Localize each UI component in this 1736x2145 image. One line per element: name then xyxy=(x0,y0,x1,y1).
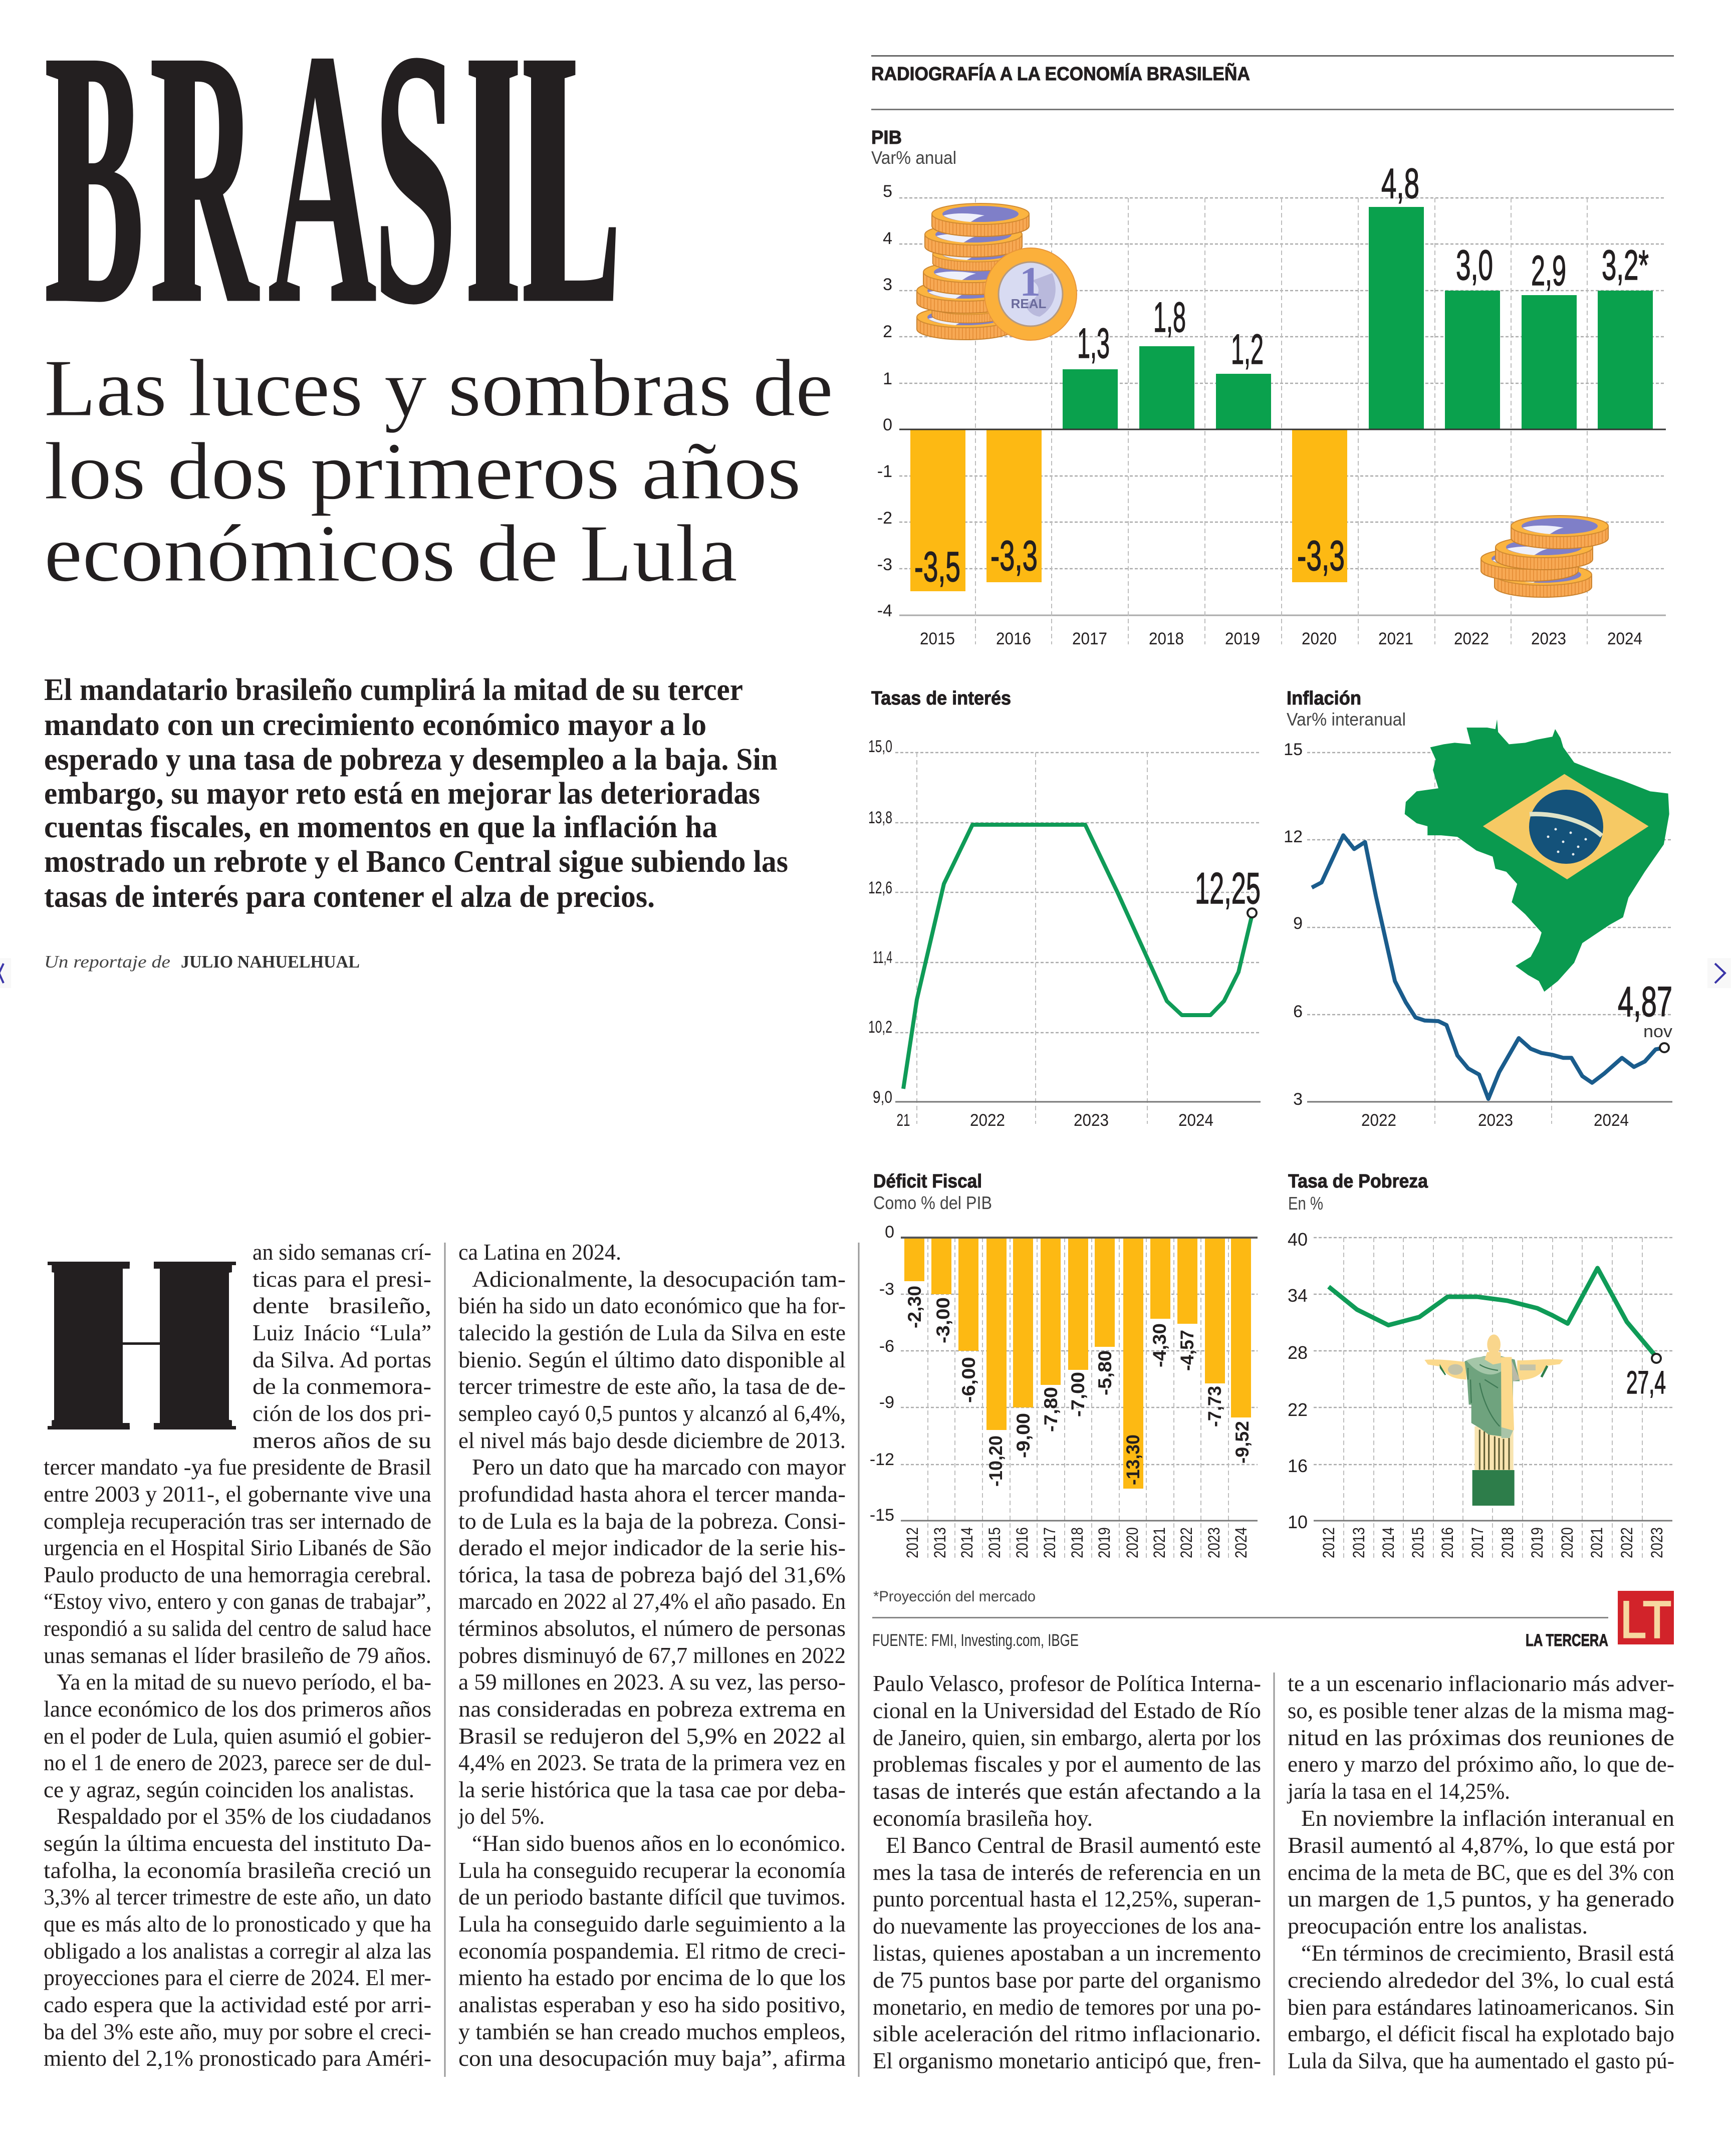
PIB value labels: 4,8 xyxy=(1381,160,1419,207)
inflation y axis labels: 9 xyxy=(1293,914,1303,933)
byline: Un reportaje de xyxy=(44,952,170,972)
interest x axis years: 21 xyxy=(897,1111,910,1130)
body column 1: proyecciones para el cierre de 2024. El mer- xyxy=(44,1965,431,1990)
body column 2 xyxy=(457,1239,846,2071)
body column 1: Ya en la mitad de su nuevo período, el ba- xyxy=(57,1669,431,1695)
body column 4: te a un escenario inflacionario más adver- xyxy=(1288,1671,1674,1696)
body column 1: respondió a su salida del centro de salud hace xyxy=(44,1615,431,1641)
interest y axis labels: 11,4 xyxy=(873,948,892,967)
poverty x axis years: 2014 xyxy=(1379,1527,1397,1558)
body column 1: 3,3% al tercer trimestre de este año, un dato xyxy=(44,1884,431,1910)
PIB value labels: 1,3 xyxy=(1077,320,1110,367)
inflation month label: nov xyxy=(1643,1022,1672,1041)
source line: FUENTE: FMI, Investing.com, IBGE xyxy=(872,1631,1079,1650)
body column 2: Lula ha conseguido recuperar la economía xyxy=(458,1857,846,1883)
body column 3: cional en la Universidad del Estado de Río xyxy=(873,1698,1261,1723)
PIB value labels: -3,3 xyxy=(990,532,1038,579)
deficit x axis years: 2018 xyxy=(1068,1527,1086,1558)
La Tercera credit: LA TERCERA xyxy=(1526,1631,1608,1650)
body column 3: de Janeiro, quien, sin embargo, alerta por los xyxy=(873,1725,1261,1750)
body column 1: ce y agraz, según coinciden los analistas. xyxy=(44,1777,414,1802)
poverty y axis labels: 16 xyxy=(1288,1456,1308,1476)
deficit value labels: -13,30 xyxy=(1123,1435,1143,1485)
byline xyxy=(44,952,360,972)
body column 2: jo del 5%. xyxy=(457,1803,545,1829)
panel: inflación line chart xyxy=(1284,688,1672,1130)
deficit y axis labels: -15 xyxy=(870,1506,894,1525)
inflation y axis labels: 6 xyxy=(1293,1002,1303,1021)
inflation y axis labels: 12 xyxy=(1284,827,1303,846)
deficit value labels: -6,00 xyxy=(958,1357,979,1403)
body column 3: monetario, en medio de temores por una po- xyxy=(873,1994,1261,2020)
deficit value labels: -7,80 xyxy=(1041,1387,1061,1432)
body column 4: nitud en las próximas dos reuniones de xyxy=(1288,1725,1674,1750)
body column 4: embargo, el déficit fiscal ha explotado bajo xyxy=(1288,2021,1674,2046)
interest value label: 12,25 xyxy=(1195,863,1261,913)
deficit x axis years: 2014 xyxy=(958,1527,976,1558)
body column 2: bién ha sido un dato económico que ha for- xyxy=(458,1293,846,1318)
right navigation arrow xyxy=(1707,958,1731,988)
PIB x axis years: 2018 xyxy=(1149,629,1184,648)
interest y axis labels: 15,0 xyxy=(868,737,892,756)
body column 2: términos absolutos, el número de personas xyxy=(458,1615,846,1641)
deficit y axis labels: 0 xyxy=(885,1223,894,1242)
body column 1: da Silva. Ad portas xyxy=(253,1347,431,1372)
deficit value labels: -5,80 xyxy=(1095,1350,1115,1395)
interest x axis years: 2024 xyxy=(1178,1111,1213,1130)
body column 4: un margen de 1,5 puntos, y ha generado xyxy=(1288,1886,1674,1912)
deficit x axis years: 2016 xyxy=(1013,1527,1031,1558)
poverty y axis labels: 40 xyxy=(1288,1229,1308,1250)
deficit x axis years: 2015 xyxy=(985,1527,1004,1558)
body column 2: Pero un dato que ha marcado con mayor xyxy=(472,1454,846,1480)
source line xyxy=(872,1617,1608,1650)
body column 1: compleja recuperación tras ser internado de xyxy=(44,1508,431,1534)
body column 1: an sido semanas crí- xyxy=(253,1239,431,1265)
subtitle: económicos de Lula xyxy=(44,509,737,599)
PIB x axis years: 2023 xyxy=(1531,629,1566,648)
body column 2: bienio. Según el último dato disponible al xyxy=(458,1347,846,1372)
PIB y axis labels: 1 xyxy=(883,369,892,388)
body column 1: Respaldado por el 35% de los ciudadanos xyxy=(57,1803,431,1829)
PIB y axis labels: 2 xyxy=(883,322,892,341)
inflation line xyxy=(1312,835,1664,1099)
poverty y axis labels: 10 xyxy=(1288,1512,1308,1532)
PIB x axis years: 2015 xyxy=(920,629,955,648)
body column 1: dente brasileño, xyxy=(253,1293,431,1318)
intro paragraph: El mandatario brasileño cumplirá la mitad de su tercer xyxy=(44,673,743,707)
byline: JULIO NAHUELHUAL xyxy=(181,952,360,972)
poverty x axis years: 2012 xyxy=(1320,1527,1338,1558)
body column 3: listas, quienes apostaban a un incremento xyxy=(873,1940,1261,1966)
deficit x axis years: 2012 xyxy=(903,1527,921,1558)
interest end marker xyxy=(1248,908,1257,917)
body column 1 xyxy=(44,1203,431,2071)
poverty x axis years: 2022 xyxy=(1618,1527,1636,1558)
poverty x axis years: 2017 xyxy=(1468,1527,1486,1558)
interest y axis labels: 13,8 xyxy=(868,808,892,827)
subtitle xyxy=(44,343,833,599)
body column 2: economía pospandemia. El ritmo de creci- xyxy=(458,1938,846,1964)
inflation end marker xyxy=(1660,1043,1669,1052)
inflation x axis years: 2022 xyxy=(1361,1111,1396,1130)
body column 1: urgencia en el Hospital Sirio Libanés de São xyxy=(44,1535,431,1560)
infographic header xyxy=(871,55,1674,110)
deficit x axis years xyxy=(903,1527,1250,1558)
PIB value labels: -3,3 xyxy=(1297,532,1345,579)
deficit subtitle: Como % del PIB xyxy=(873,1193,992,1213)
intro paragraph: mandato con un crecimiento económico mayor a lo xyxy=(44,708,706,742)
deficit value labels: -4,30 xyxy=(1149,1323,1170,1367)
deficit x axis years: 2013 xyxy=(931,1527,949,1558)
body column 2: derado el mejor indicador de la serie his- xyxy=(458,1535,846,1560)
PIB y axis labels: -3 xyxy=(877,555,892,574)
body column 4: Brasil aumentó al 4,87%, lo que está por xyxy=(1288,1832,1674,1858)
icon: Brazil map with flag xyxy=(1405,720,1669,992)
body column 2: 4,4% en 2023. Se trata de la primera vez en xyxy=(458,1750,846,1775)
PIB bars xyxy=(910,207,1653,591)
poverty x axis years: 2019 xyxy=(1528,1527,1546,1558)
deficit y axis labels: -3 xyxy=(879,1280,894,1299)
PIB x axis years: 2016 xyxy=(996,629,1031,648)
icon: stack of real coins xyxy=(917,203,1077,340)
body column 1: tafolha, la economía brasileña creció un xyxy=(44,1857,431,1883)
inflation x axis years: 2023 xyxy=(1478,1111,1513,1130)
inflation x axis years xyxy=(1361,1111,1629,1130)
body column 3: tasas de interés que están afectando a la xyxy=(873,1778,1261,1804)
poverty x axis years: 2015 xyxy=(1409,1527,1427,1558)
deficit value labels: -10,20 xyxy=(985,1436,1006,1487)
poverty line xyxy=(1329,1268,1656,1356)
body column 2: talecido la gestión de Lula da Silva en este xyxy=(458,1320,846,1345)
body column 2: y también se han creado muchos empleos, xyxy=(458,2019,846,2044)
subtitle: Las luces y sombras de xyxy=(44,343,833,433)
body column 4: encima de la meta de BC, que es del 3% con xyxy=(1288,1859,1674,1885)
poverty y axis labels xyxy=(1288,1229,1308,1532)
body column 1: que es más alto de lo pronosticado y que ha xyxy=(44,1911,431,1937)
PIB y axis labels: 5 xyxy=(883,182,892,201)
poverty y axis labels: 28 xyxy=(1288,1342,1308,1363)
body column 1: no el 1 de enero de 2023, parece ser de dul- xyxy=(44,1750,431,1775)
body column 3: sible aceleración del ritmo inflacionario. xyxy=(873,2021,1261,2046)
icon: stack of real coins: 1 xyxy=(1020,259,1041,305)
deficit x axis years: 2022 xyxy=(1177,1527,1195,1558)
body column 4: preocupación entre los analistas. xyxy=(1288,1913,1588,1939)
inflation x axis years: 2024 xyxy=(1594,1111,1629,1130)
PIB x axis years: 2022 xyxy=(1454,629,1489,648)
intro paragraph xyxy=(44,673,788,914)
interest y axis labels: 10,2 xyxy=(868,1018,892,1037)
body column 1: ba del 3% este año, muy por sobre el creci- xyxy=(44,2019,431,2044)
interest title: Tasas de interés xyxy=(871,688,1011,709)
PIB x axis years: 2017 xyxy=(1072,629,1107,648)
poverty x axis years: 2013 xyxy=(1350,1527,1368,1558)
poverty y axis labels: 34 xyxy=(1288,1285,1308,1306)
body column 3: El Banco Central de Brasil aumentó este xyxy=(886,1832,1261,1858)
deficit x axis years: 2019 xyxy=(1095,1527,1113,1558)
inflation value label: 4,87 xyxy=(1618,978,1672,1025)
PIB x axis years xyxy=(920,629,1642,648)
body column 2: de un periodo bastante difícil que tuvimos. xyxy=(458,1884,846,1910)
decorative column rules xyxy=(445,1243,1274,2077)
poverty subtitle: En % xyxy=(1288,1193,1323,1214)
PIB y axis labels: -2 xyxy=(877,509,892,528)
body column 2: Brasil se redujeron del 5,9% en 2022 al xyxy=(458,1723,846,1749)
panel: déficit fiscal bar chart xyxy=(870,1171,1258,1559)
body column 2: Adicionalmente, la desocupación tam- xyxy=(472,1266,846,1292)
body column 1: entre 2003 y 2011-, el gobernante vive una xyxy=(44,1481,431,1507)
PIB value labels: -3,5 xyxy=(914,543,960,590)
body column 2: profundidad hasta ahora el tercer manda- xyxy=(458,1481,846,1507)
body column 1: “Estoy vivo, entero y con ganas de trabajar”, xyxy=(44,1588,431,1614)
body column 4: Lula da Silva, que ha aumentado el gasto pú- xyxy=(1288,2048,1674,2073)
icon: small coin stack xyxy=(1481,516,1608,597)
body column 1: ción de los dos pri- xyxy=(253,1400,431,1426)
poverty x axis years xyxy=(1320,1527,1666,1558)
icon: Cristo Redentor statue xyxy=(1424,1334,1563,1506)
body column 4: En noviembre la inflación interanual en xyxy=(1301,1805,1674,1831)
poverty value label: 27,4 xyxy=(1626,1364,1666,1400)
body column 2: a 59 millones en 2023. A su vez, las perso- xyxy=(458,1669,846,1695)
infographic header: RADIOGRAFÍA A LA ECONOMÍA BRASILEÑA xyxy=(871,63,1250,85)
body column 4: “En términos de crecimiento, Brasil está xyxy=(1301,1940,1674,1966)
deficit value labels: -4,57 xyxy=(1177,1330,1197,1371)
PIB value labels xyxy=(914,160,1649,590)
poverty x axis years: 2021 xyxy=(1588,1527,1606,1558)
body column 3: de 75 puntos base por parte del organismo xyxy=(873,1967,1261,1993)
body column 2: miento ha estado por encima de lo que los xyxy=(458,1965,846,1990)
deficit title: Déficit Fiscal xyxy=(873,1171,982,1192)
body column 3: do nuevamente las proyecciones de los ana- xyxy=(873,1913,1261,1939)
body column 2: “Han sido buenos años en lo económico. xyxy=(472,1830,846,1856)
body column 2: pobres disminuyó de 67,7 millones en 2022 xyxy=(458,1642,846,1668)
body column 2: sempleo cayó 0,5 puntos y alcanzó al 6,4%, xyxy=(458,1400,846,1426)
interest x axis years: 2023 xyxy=(1074,1111,1109,1130)
interest y axis labels: 9,0 xyxy=(873,1088,892,1107)
body column 1: según la última encuesta del instituto Da- xyxy=(44,1830,431,1856)
PIB y axis labels: 4 xyxy=(883,229,892,248)
deficit value labels: -7,73 xyxy=(1204,1386,1225,1427)
interest x axis years xyxy=(897,1111,1213,1130)
PIB x axis years: 2019 xyxy=(1225,629,1260,648)
body column 3: economía brasileña hoy. xyxy=(873,1805,1093,1831)
LT logo: LT xyxy=(1620,1591,1671,1649)
interest x axis years: 2022 xyxy=(970,1111,1005,1130)
intro paragraph: tasas de interés para contener el alza de precios. xyxy=(44,880,655,914)
deficit x axis years: 2023 xyxy=(1205,1527,1223,1558)
body column 2: Lula ha conseguido darle seguimiento a la xyxy=(458,1911,846,1937)
poverty x axis years: 2020 xyxy=(1558,1527,1576,1558)
body column 1: de la conmemora- xyxy=(253,1373,431,1399)
body column 3: El organismo monetario anticipó que, fren- xyxy=(873,2048,1261,2073)
poverty end marker xyxy=(1652,1354,1661,1363)
body column 3: problemas fiscales y por el aumento de las xyxy=(873,1751,1261,1777)
intro paragraph: mostrado un rebrote y el Banco Central sigue subiendo las xyxy=(44,845,788,879)
body column 3: punto porcentual hasta el 12,25%, superan- xyxy=(873,1886,1261,1912)
PIB value labels: 1,8 xyxy=(1153,294,1186,341)
body column 2: marcado en 2022 al 27,4% el año pasado. En xyxy=(458,1588,846,1614)
panel: tasa de pobreza line chart xyxy=(1288,1171,1672,1559)
deficit x axis years: 2020 xyxy=(1123,1527,1141,1558)
poverty x axis years: 2018 xyxy=(1499,1527,1517,1558)
footnote: *Proyección del mercado xyxy=(873,1588,1036,1605)
deficit x axis years: 2017 xyxy=(1041,1527,1059,1558)
deficit x axis years: 2024 xyxy=(1232,1527,1250,1558)
interest rate line xyxy=(903,825,1253,1089)
poverty x axis years: 2023 xyxy=(1648,1527,1666,1558)
body column 4: jaría la tasa en el 14,25%. xyxy=(1287,1778,1510,1804)
PIB y axis labels xyxy=(877,182,892,620)
body column 4: enero y marzo del próximo año, lo que de- xyxy=(1288,1751,1674,1777)
body column 2: el nivel más bajo desde diciembre de 2013. xyxy=(458,1427,846,1453)
intro paragraph: embargo, su mayor reto está en mejorar las deterioradas xyxy=(44,777,760,811)
body column 1: Luiz Inácio “Lula” xyxy=(253,1320,431,1345)
body column 4 xyxy=(1287,1671,1674,2073)
body column 3 xyxy=(873,1671,1261,2073)
PIB y axis labels: 0 xyxy=(883,415,892,434)
PIB value labels: 3,0 xyxy=(1456,242,1493,289)
body column 2: ca Latina en 2024. xyxy=(458,1239,621,1265)
deficit y axis labels: -6 xyxy=(879,1337,894,1356)
PIB y axis labels: -4 xyxy=(877,601,892,620)
poverty y axis labels: 22 xyxy=(1288,1399,1308,1420)
deficit value labels: -9,00 xyxy=(1013,1413,1034,1458)
inflation y axis labels xyxy=(1284,740,1303,1109)
PIB y axis labels: 3 xyxy=(883,275,892,294)
inflation y axis labels: 15 xyxy=(1284,740,1303,759)
deficit value labels xyxy=(904,1286,1253,1487)
poverty title: Tasa de Pobreza xyxy=(1288,1171,1428,1192)
PIB x axis years: 2020 xyxy=(1302,629,1337,648)
body column 3: Paulo Velasco, profesor de Política Interna- xyxy=(873,1671,1261,1696)
body column 1: ticas para el presi- xyxy=(253,1266,431,1292)
body column 1: lance económico de los dos primeros años xyxy=(44,1696,431,1722)
panel: PIB bar chart xyxy=(871,127,1666,648)
drop cap H: H xyxy=(48,1203,236,1485)
deficit y axis labels: -9 xyxy=(879,1393,894,1412)
body column 1: en el poder de Lula, quien asumió el gobier- xyxy=(44,1723,431,1749)
body column 4: so, es posible tener alzas de la misma mag- xyxy=(1288,1698,1674,1723)
body column 1: meros años de su xyxy=(253,1427,431,1453)
poverty x axis years: 2016 xyxy=(1438,1527,1456,1558)
PIB value labels: 2,9 xyxy=(1531,247,1566,294)
body column 1: miento del 2,1% pronosticado para Améri- xyxy=(44,2045,431,2071)
deficit y axis labels: -12 xyxy=(870,1450,894,1469)
inflation y axis labels: 3 xyxy=(1293,1090,1303,1109)
inflation title: Inflación xyxy=(1287,688,1361,709)
interest y axis labels xyxy=(868,737,892,1107)
body column 2: tercer trimestre de este año, la tasa de de- xyxy=(458,1373,846,1399)
body column 2: analistas esperaban y eso ha sido positivo, xyxy=(458,1992,846,2017)
body column 4: creciendo alrededor del 3%, lo cual está xyxy=(1288,1967,1674,1993)
PIB y axis labels: -1 xyxy=(877,462,892,481)
deficit bars xyxy=(904,1238,1251,1489)
PIB title: PIB xyxy=(871,127,902,148)
PIB x axis years: 2024 xyxy=(1607,629,1642,648)
inflation subtitle: Var% interanual xyxy=(1287,709,1406,730)
body column 1: obligado a los analistas a corregir al alza las xyxy=(44,1938,431,1964)
deficit value labels: -9,52 xyxy=(1232,1421,1253,1464)
PIB value labels: 3,2* xyxy=(1602,242,1649,289)
body column 1: Paulo producto de una hemorragia cerebral. xyxy=(44,1562,431,1587)
PIB x axis years: 2021 xyxy=(1378,629,1413,648)
body column 1: tercer mandato -ya fue presidente de Brasil xyxy=(44,1454,431,1480)
panel: tasas de interés line chart xyxy=(868,688,1261,1130)
body column 2: nas consideradas en pobreza extrema en xyxy=(458,1696,846,1722)
deficit value labels: -7,00 xyxy=(1068,1372,1088,1417)
PIB value labels: 1,2 xyxy=(1231,326,1264,373)
body column 2: to de Lula es la baja de la pobreza. Consi- xyxy=(458,1508,846,1534)
body column 2: la serie histórica que la tasa cae por deba- xyxy=(458,1777,846,1802)
body column 2: tórica, la tasa de pobreza bajó del 31,6% xyxy=(458,1562,846,1587)
icon: stack of real coins: REAL xyxy=(1011,296,1047,311)
intro paragraph: cuentas fiscales, en momentos en que la inflación ha xyxy=(44,810,717,844)
deficit value labels: -2,30 xyxy=(904,1286,925,1328)
intro paragraph: esperado y una tasa de pobreza y desempleo a la baja. Sin xyxy=(44,743,778,777)
deficit x axis years: 2021 xyxy=(1150,1527,1168,1558)
subtitle: los dos primeros años xyxy=(44,426,801,517)
deficit value labels: -3,00 xyxy=(933,1297,953,1343)
PIB subtitle: Var% anual xyxy=(871,147,956,168)
body column 3: mes la tasa de interés de referencia en un xyxy=(873,1859,1261,1885)
body column 4: bien para estándares latinoamericanos. Sin xyxy=(1288,1994,1674,2020)
interest y axis labels: 12,6 xyxy=(868,878,892,897)
deficit y axis labels xyxy=(870,1223,894,1525)
body column 1: cado espera que la actividad esté por arri- xyxy=(44,1992,431,2017)
body column 1: unas semanas el líder brasileño de 79 años. xyxy=(44,1642,431,1668)
left navigation arrow xyxy=(0,958,11,988)
body column 2: con una desocupación muy baja”, afirma xyxy=(458,2045,846,2071)
